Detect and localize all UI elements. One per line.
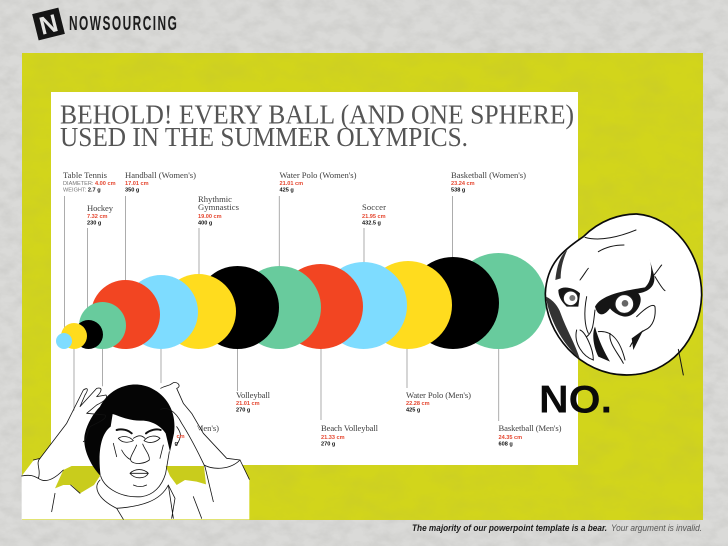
ball: volleyball <box>196 266 279 349</box>
label: volleyball: Volleyball <box>236 390 271 400</box>
label: basketball women <box>451 170 526 194</box>
label: volleyball: 21.01 cm <box>236 401 260 407</box>
title: BEHOLD! EVERY BALL (AND ONE SPHERE) <box>60 100 574 130</box>
white cut-out <box>22 382 249 519</box>
ball: beach volleyball <box>278 264 363 349</box>
logo: Nowsourcing <box>32 8 177 42</box>
head outline <box>545 214 702 375</box>
ball: handball men <box>124 275 198 349</box>
label: handball women: 350 g <box>125 188 140 194</box>
hands and arms <box>22 383 249 518</box>
label: beach volleyball: 270 g <box>321 442 336 448</box>
label: handball men: 19.11 cm <box>160 434 183 440</box>
meme: head in hands <box>22 382 249 519</box>
label: water polo women: Water Polo (Women's) <box>280 170 357 180</box>
label: water polo women: 21.01 cm <box>280 181 303 187</box>
label: rhythmic gymnastics: 400 g <box>198 220 213 226</box>
wrinkles and mouth <box>576 230 683 375</box>
label: basketball men: 24.35 cm <box>498 435 522 441</box>
white infographic panel <box>51 92 578 465</box>
ball: table tennis <box>56 333 72 349</box>
label: rhythmic gymnastics: Gymnastics <box>198 202 240 212</box>
label: water polo women: 425 g <box>280 188 294 194</box>
label: water polo men: Water Polo (Men's) <box>406 390 471 400</box>
yellow gaps <box>55 466 206 493</box>
ball: soccer <box>320 262 407 349</box>
label: volleyball <box>236 390 271 414</box>
label: basketball men <box>498 423 562 448</box>
label: rhythmic gymnastics: 19.00 cm <box>198 214 222 220</box>
logo wordmark: NOWSOURCING <box>69 12 177 35</box>
label: hockey: 7.32 cm <box>87 214 108 220</box>
label: rhythmic gymnastics <box>198 194 240 226</box>
label: basketball women: 23.24 cm <box>451 181 475 187</box>
label: soccer: Soccer <box>362 202 386 212</box>
hair <box>84 385 174 476</box>
label: soccer <box>362 202 386 226</box>
eyes <box>563 291 634 313</box>
ball: basketball women <box>407 257 499 349</box>
label: handball women: Handball (Women's) <box>125 170 196 180</box>
label: beach volleyball <box>321 423 379 448</box>
label: water polo men: 22.28 cm <box>406 401 430 407</box>
dark brow and eye socket <box>558 258 654 317</box>
hatching on left <box>546 250 580 359</box>
label: table tennis: WEIGHT: 2.7 g <box>63 188 101 194</box>
ball: basketball men <box>450 253 546 349</box>
label: handball men: 475 g <box>160 441 175 447</box>
label: hockey: Hockey <box>87 203 114 213</box>
ball: water polo women <box>238 266 321 349</box>
label: basketball women: 538 g <box>451 188 466 194</box>
logo mark <box>32 8 65 42</box>
NO. caption: NO. <box>539 378 612 422</box>
ball: tennis <box>61 323 87 349</box>
ball: handball women <box>91 280 160 349</box>
ball: water polo men <box>364 261 452 349</box>
label: water polo women <box>280 170 357 194</box>
label: table tennis <box>63 170 116 194</box>
label: table tennis: Table Tennis <box>63 170 108 180</box>
logo mark: N <box>37 9 61 41</box>
face lines <box>97 429 175 519</box>
title: USED IN THE SUMMER OLYMPICS. <box>60 122 468 152</box>
label: volleyball: 270 g <box>236 408 251 414</box>
leader lines <box>64 196 499 440</box>
label: table tennis: DIAMETER: 4.00 cm <box>63 181 116 187</box>
label: hockey: 230 g <box>87 220 102 226</box>
label: rhythmic gymnastics: Rhythmic <box>198 194 232 204</box>
footer caption: The majority of our powerpoint template is a bear. <box>412 523 607 533</box>
label: beach volleyball: Beach Volleyball <box>321 423 379 433</box>
visible fragment of hidden label: cm <box>176 434 185 440</box>
label: basketball men: Basketball (Men's) <box>498 423 562 433</box>
ball: rhythmic gymnastics <box>161 274 236 349</box>
footer caption: Your argument is invalid. <box>611 523 702 533</box>
label: water polo men: 425 g <box>406 408 421 414</box>
visible fragment of hidden label <box>174 434 185 447</box>
label: basketball men: 608 g <box>498 442 513 448</box>
ball chart <box>56 253 546 349</box>
label: beach volleyball: 21.33 cm <box>321 435 345 441</box>
label: water polo men <box>406 390 471 414</box>
visible fragment of hidden label: g <box>174 441 178 447</box>
label: soccer: 21.95 cm <box>362 214 386 220</box>
ball: hockey <box>74 320 103 349</box>
meme: rage face <box>545 214 702 375</box>
label: soccer: 432.5 g <box>362 220 382 226</box>
ball: field ball <box>79 302 126 349</box>
label: handball men <box>160 423 219 447</box>
label: handball women: 17.01 cm <box>125 181 149 187</box>
label: handball women <box>125 170 196 194</box>
label: basketball women: Basketball (Women's) <box>451 170 526 180</box>
label: hockey <box>87 203 114 226</box>
label: handball men: Handball (Men's) <box>160 423 219 433</box>
title <box>60 100 574 152</box>
